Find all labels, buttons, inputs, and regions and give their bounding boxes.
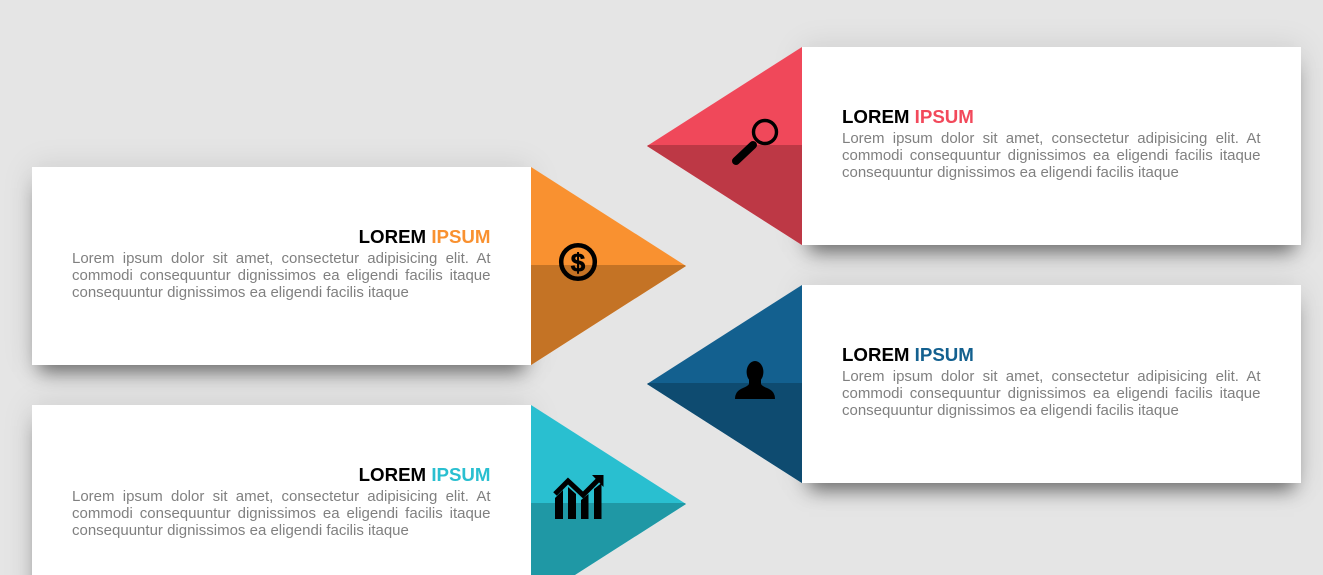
body text: middle right: Lorem ipsum dolor sit amet, consectetur adipisicing elit. At commodi consequuntur dignissimos ea eligendi facilis itaque consequuntur dignissimos ea eligendi facilis itaque [842, 368, 1260, 419]
body text: top right: Lorem ipsum dolor sit amet, consectetur adipisicing elit. At commodi consequuntur dignissimos ea eligendi facilis itaque consequuntur dignissimos ea eligendi facilis itaque [842, 130, 1260, 181]
text block: middle right [842, 344, 1260, 419]
panel: card upper left [32, 167, 531, 365]
text block: top right [842, 106, 1260, 181]
panel: card lower left [32, 405, 531, 575]
arrow: teal [531, 405, 686, 575]
icon: person [735, 361, 775, 399]
icon: growth chart [555, 475, 604, 519]
panel: card middle right [802, 285, 1301, 483]
heading: top right: LOREM IPSUM [842, 106, 974, 127]
heading: lower left: LOREM IPSUM [359, 464, 490, 485]
icon: dollar coin: $ [571, 248, 586, 278]
heading: upper left: LOREM IPSUM [359, 226, 490, 247]
arrow: orange [531, 167, 686, 365]
arrow: blue [647, 285, 802, 483]
text block: upper left [72, 226, 490, 301]
heading: middle right: LOREM IPSUM [842, 344, 974, 365]
body text: upper left: Lorem ipsum dolor sit amet, consectetur adipisicing elit. At commodi consequuntur dignissimos ea eligendi facilis itaque consequuntur dignissimos ea eligendi facilis itaque [72, 250, 490, 301]
icon: dollar coin [561, 245, 595, 279]
panel: card top right [802, 47, 1301, 245]
arrow: red [647, 47, 802, 245]
icon: magnifier [736, 120, 776, 161]
body text: lower left: Lorem ipsum dolor sit amet, consectetur adipisicing elit. At commodi consequuntur dignissimos ea eligendi facilis itaque consequuntur dignissimos ea eligendi facilis itaque [72, 488, 490, 539]
text block: lower left [72, 464, 490, 539]
